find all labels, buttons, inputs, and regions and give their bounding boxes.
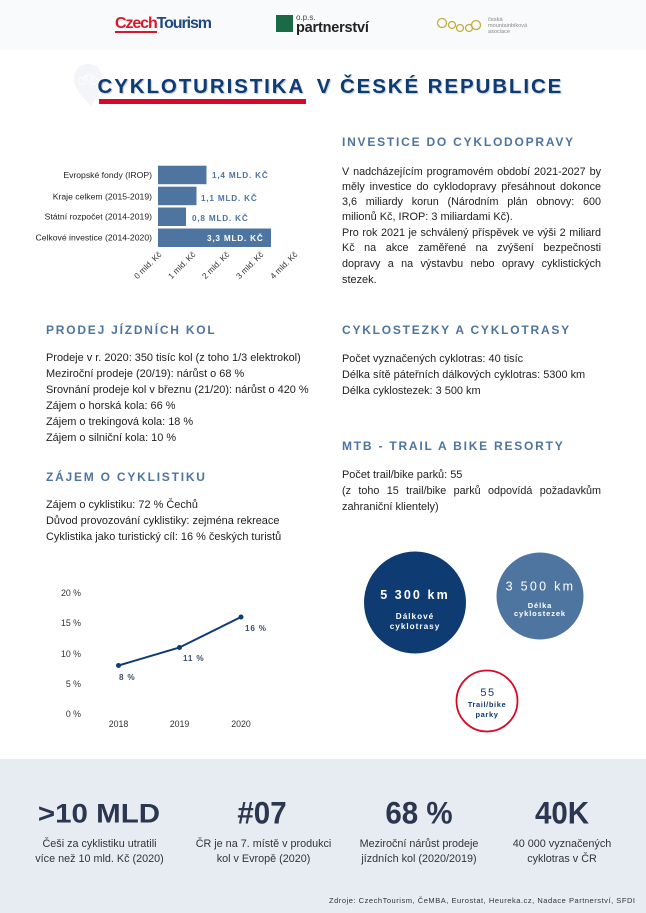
bar chart: investice: 0,8 MLD. KČ — [192, 212, 249, 223]
circle: 5 300 km: 5 300 km — [380, 588, 450, 602]
heading: prodej jízdních kol: PRODEJ JÍZDNÍCH KOL — [46, 323, 217, 337]
stat: 68 %: Meziroční nárůst prodeje — [360, 838, 478, 850]
logo: o.p.s. partnerství: partnerství — [296, 20, 369, 36]
text: zájem list: Důvod provozování cyklistiky: zejména rekreace — [46, 515, 279, 527]
circle: 55 trail/bike parky: 55 — [480, 687, 496, 699]
stat: >10 MLD: Češi za cyklistiku utratili — [42, 838, 156, 850]
stat: 68 %: jízdních kol (2020/2019) — [361, 853, 477, 865]
line chart: cyklistika jako turistický cíl: 2019 — [170, 719, 189, 729]
text: cyklostezky list: Délka cyklostezek: 3 500 km — [342, 385, 481, 397]
text: cyklostezky list: Počet vyznačených cyklotras: 40 tisíc — [342, 353, 523, 365]
text: prodej list: Zájem o trekingová kola: 18 % — [46, 416, 193, 428]
bar chart: investice: Kraje celkem (2015-2019) — [53, 192, 152, 202]
text: MTB: zahraniční klientely) — [342, 501, 439, 513]
text: prodej list: Prodeje v r. 2020: 350 tisíc kol (z toho 1/3 elektrokol) — [46, 352, 301, 364]
text: MTB: (z toho 15 trail/bike parků odpovídá požadavkům — [342, 485, 601, 497]
bar chart: investice: 4 mld. Kč — [268, 249, 299, 281]
logo: CzechTourism: Czech — [115, 15, 157, 32]
stat: 40K: cyklotras v ČR — [527, 853, 597, 865]
heading: MTB: MTB - TRAIL A BIKE RESORTY — [342, 439, 565, 453]
bar chart: investice: 1,4 MLD. KČ — [212, 169, 269, 180]
bar chart: investice: 3,3 MLD. KČ — [207, 232, 264, 243]
circle: 3 500 km: cyklostezek — [514, 609, 566, 618]
sources: Zdroje: CzechTourism, ČeMBA, Eurostat, Heureka.cz, Nadace Partnerství, SFDI — [329, 896, 636, 905]
text: investice paragraph: Kč na akce zaměřené na zvýšení bezpečnosti — [342, 242, 601, 254]
circle: 5 300 km: Dálkové — [396, 612, 434, 621]
text: cyklostezky list — [342, 353, 585, 397]
stat: 40K: 40 000 vyznačených — [513, 838, 611, 850]
bar chart: investice: 0 mld. Kč — [132, 249, 163, 281]
stat: #07: kol v Evropě (2020) — [217, 853, 310, 865]
bar chart: investice: Celkové investice (2014-2020) — [35, 232, 152, 242]
stat: >10 MLD: >10 MLD — [38, 798, 160, 829]
logo: česká mountainbiková asociace — [436, 17, 528, 35]
bar chart: investice: 1 mld. Kč — [166, 249, 197, 281]
icon: pale bike location pin — [74, 64, 102, 106]
heading: investice do cyklodopravy: INVESTICE DO CYKLODOPRAVY — [342, 135, 575, 149]
logo: o.p.s. partnerství: o.p.s. — [296, 13, 316, 22]
text: zájem list: Zájem o cyklistiku: 72 % Čechů — [46, 499, 198, 511]
line chart: cyklistika jako turistický cíl: 0 % — [66, 709, 81, 719]
stat: >10 MLD — [35, 798, 164, 865]
text: investice paragraph: V nadcházejícím programovém období 2021-2027 by — [342, 166, 601, 178]
text: prodej list: Zájem o silniční kola: 10 % — [46, 432, 176, 444]
circle: 3 500 km: 3 500 km — [506, 580, 575, 594]
circle: 5 300 km: cyklotrasy — [390, 622, 440, 631]
line chart: cyklistika jako turistický cíl: 2020 — [231, 719, 251, 729]
stat: #07 — [196, 796, 331, 865]
heading: zájem o cyklistiku: ZÁJEM O CYKLISTIKU — [46, 470, 207, 484]
line chart: cyklistika jako turistický cíl: 2018 — [109, 719, 128, 729]
circle: 55 trail/bike parky: parky — [475, 710, 499, 719]
bar chart: investice: 3 mld. Kč — [234, 249, 265, 281]
stat: 40K: 40K — [535, 796, 589, 831]
stat: #07: #07 — [237, 796, 287, 831]
circle: 55 trail/bike parky: Trail/bike — [468, 700, 506, 709]
bar chart: investice: Státní rozpočet (2014-2019) — [45, 212, 152, 222]
stat: >10 MLD: více než 10 mld. Kč (2020) — [35, 853, 164, 865]
line chart: cyklistika jako turistický cíl: 5 % — [66, 679, 81, 689]
stat: 68 % — [360, 796, 478, 865]
line chart: cyklistika jako turistický cíl: 8 % — [119, 673, 136, 682]
logo: česká mountainbiková asociace: česká — [488, 17, 503, 23]
stat: 68 %: 68 % — [385, 796, 453, 831]
bar chart: investice — [35, 166, 299, 281]
text: prodej list: Zájem o horská kola: 66 % — [46, 400, 176, 412]
circle: 55 trail/bike parky — [456, 670, 518, 732]
text: MTB: Počet trail/bike parků: 55 — [342, 469, 462, 481]
text: cyklostezky list: Délka sítě páteřních dálkových cyklotras: 5300 km — [342, 369, 585, 381]
logo band — [0, 0, 646, 50]
circle: 3 500 km — [496, 552, 584, 640]
stat: 40K — [513, 796, 611, 865]
title underline — [99, 99, 306, 104]
line chart: cyklistika jako turistický cíl: 16 % — [245, 624, 267, 633]
line chart: cyklistika jako turistický cíl: 10 % — [61, 649, 81, 659]
text: investice paragraph: dopravy a na výstavbu nebo opravy cyklistických — [342, 258, 601, 270]
text: MTB — [342, 469, 601, 513]
text: prodej list: Srovnání prodeje kol v březnu (21/20): nárůst o 420 % — [46, 384, 309, 396]
line chart: cyklistika jako turistický cíl — [61, 588, 267, 729]
text: prodej list — [46, 352, 309, 444]
circle: 5 300 km — [364, 552, 466, 654]
bar chart: investice: 1,1 MLD. KČ — [201, 192, 258, 203]
bar chart: investice: 2 mld. Kč — [200, 249, 231, 281]
circle: 3 500 km: Délka — [528, 601, 552, 610]
title: CYKLOTURISTIKA V ČESKÉ REPUBLICE — [98, 75, 563, 98]
logo: CzechTourism: Tourism — [157, 15, 211, 32]
line chart: cyklistika jako turistický cíl: 11 % — [183, 654, 204, 663]
bar chart: investice: Evropské fondy (IROP) — [63, 170, 152, 180]
footer band — [0, 759, 646, 913]
text: prodej list: Meziroční prodeje (20/19): nárůst o 68 % — [46, 368, 244, 380]
text: zájem list — [46, 498, 281, 543]
text: investice paragraph — [342, 166, 601, 286]
text: investice paragraph: měly investice do cyklodopravy přesáhnout dokonce — [342, 181, 601, 193]
text: investice paragraph: 3,6 miliardy korun (Národním plán obnovy: 600 — [342, 196, 601, 208]
line chart: cyklistika jako turistický cíl: 20 % — [61, 588, 81, 598]
line chart: cyklistika jako turistický cíl: 15 % — [61, 618, 81, 628]
text: investice paragraph: Pro rok 2021 je schválený příspěvek ve výši 2 miliard — [342, 227, 601, 239]
logo: česká mountainbiková asociace: asociace — [488, 29, 510, 35]
logo: česká mountainbiková asociace: mountainbiková — [488, 23, 527, 29]
text: zájem list: Cyklistika jako turistický cíl: 16 % českých turistů — [46, 531, 281, 543]
logo: CzechTourism — [115, 15, 211, 33]
text: investice paragraph: stezek. — [342, 274, 377, 286]
heading: cyklostezky a cyklotrasy: CYKLOSTEZKY A CYKLOTRASY — [342, 323, 571, 337]
text: investice paragraph: milionů Kč, IROP: 3 miliardami Kč). — [342, 211, 513, 223]
stat: #07: ČR je na 7. místě v produkci — [196, 838, 331, 850]
logo: o.p.s. partnerství — [276, 13, 370, 36]
